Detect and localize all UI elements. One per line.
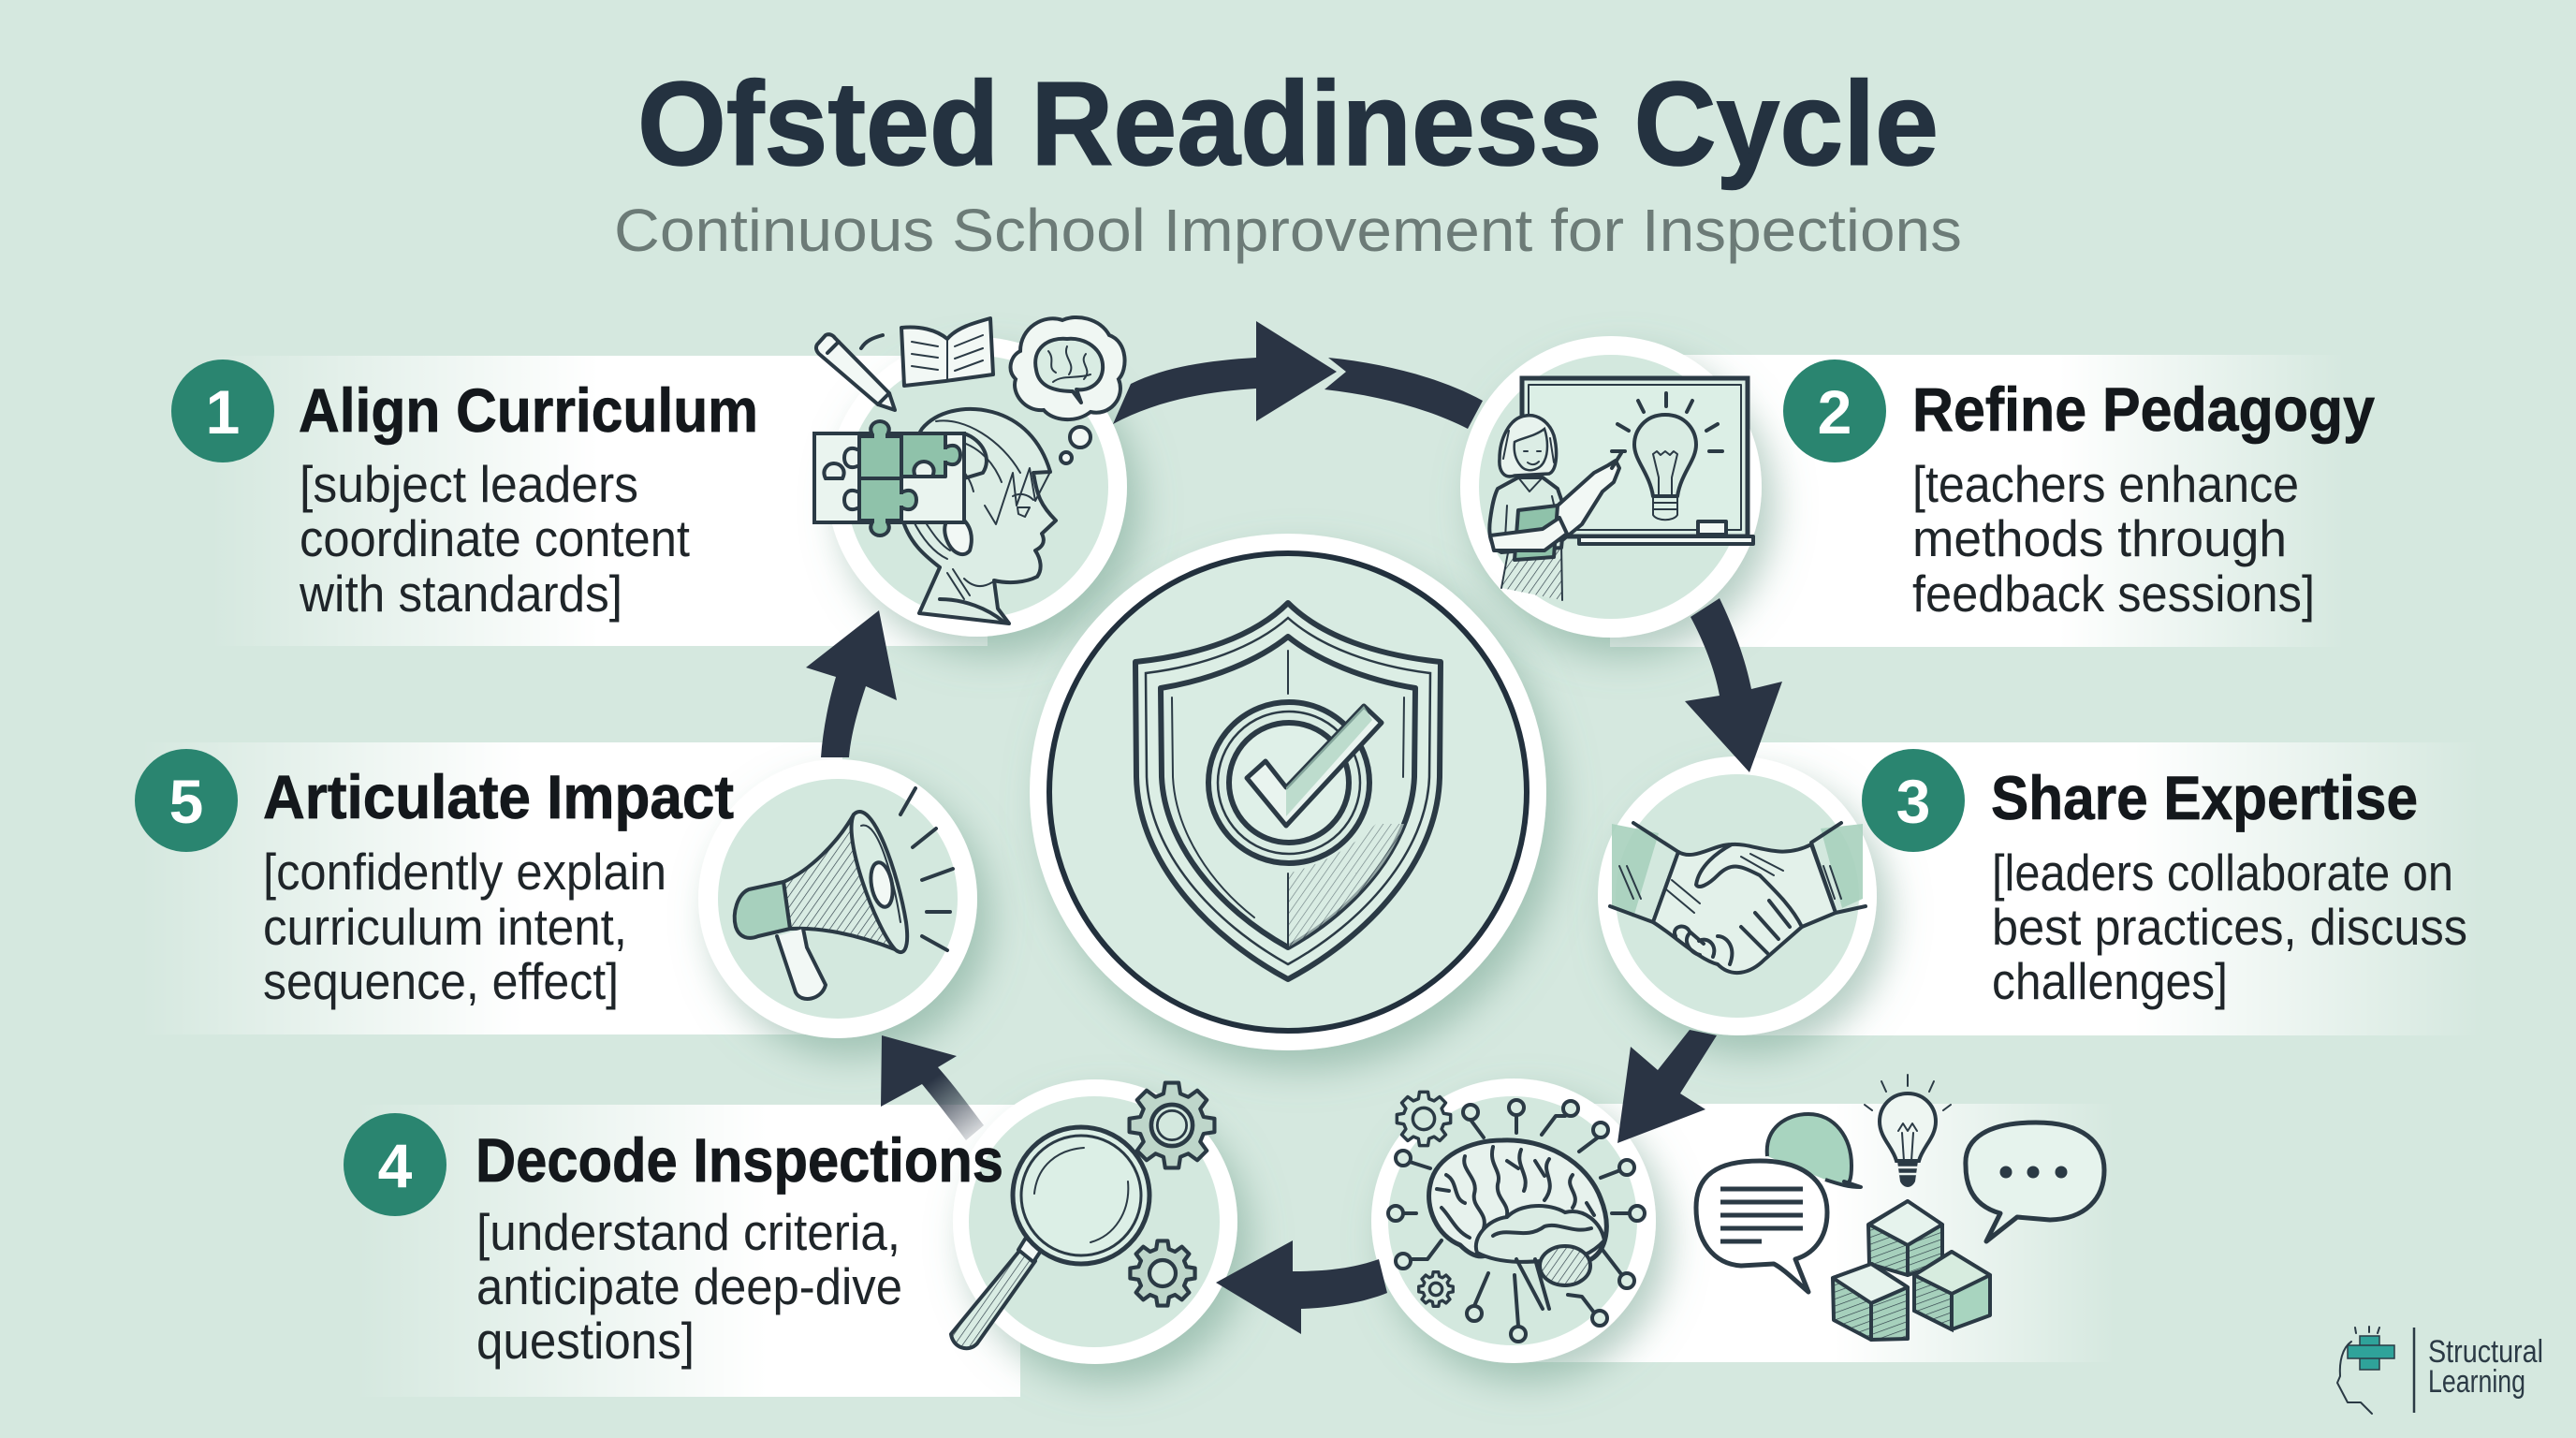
circle: brain bbox=[1371, 1078, 1656, 1363]
logo text: Learning bbox=[2428, 1364, 2525, 1400]
circle: step 2 bbox=[1460, 336, 1762, 638]
body 2: methods through bbox=[1912, 509, 2287, 567]
whiteboard bbox=[1522, 378, 1753, 544]
badge 5 bbox=[135, 749, 238, 852]
arrow: brain to step 4 bbox=[1216, 1240, 1387, 1334]
badge 2 bbox=[1783, 360, 1886, 462]
heading 1: Align Curriculum bbox=[299, 375, 758, 445]
teacher bbox=[1489, 416, 1621, 600]
panel: step 4 background bbox=[356, 1105, 1020, 1397]
subtitle: Continuous School Improvement for Inspections bbox=[614, 197, 1962, 264]
body 4: [understand criteria, bbox=[476, 1203, 900, 1261]
circle: step 1 bbox=[827, 337, 1127, 637]
panel: ideas background bbox=[1516, 1104, 2115, 1362]
badge 3 bbox=[1862, 749, 1965, 852]
body 2: [teachers enhance bbox=[1912, 455, 2299, 513]
badge 1: 1 bbox=[206, 377, 240, 447]
arrow: step 5 to step 1 bbox=[806, 610, 897, 757]
badge 4: 4 bbox=[378, 1131, 413, 1200]
arrow: step 1 to step 2 tail bbox=[1325, 358, 1483, 429]
icon: megaphone bbox=[735, 788, 953, 999]
badge 5: 5 bbox=[169, 767, 203, 836]
gear top bbox=[1397, 1092, 1451, 1146]
panel: step 5 background bbox=[140, 742, 842, 1034]
body 5 bbox=[263, 843, 666, 1010]
puzzle bbox=[814, 421, 987, 536]
circle: step 3 bbox=[1598, 756, 1877, 1035]
arrow: step 4 to step 5 bbox=[881, 1035, 984, 1140]
icon: brain with network nodes bbox=[1388, 1092, 1645, 1342]
heading 3: Share Expertise bbox=[1991, 763, 2418, 832]
boy head bbox=[900, 409, 1056, 624]
ellipsis speech bubble bbox=[1966, 1123, 2104, 1241]
gear large bbox=[1130, 1083, 1214, 1167]
arrow: step 1 to step 2 bbox=[1113, 321, 1337, 424]
lightbulb bbox=[1612, 393, 1722, 520]
arrow: step 3 to brain bbox=[1617, 1030, 1717, 1143]
step 1 text bbox=[171, 360, 758, 623]
badge 2: 2 bbox=[1818, 377, 1852, 447]
cubes bbox=[1833, 1201, 1990, 1340]
heading 2: Refine Pedagogy bbox=[1912, 374, 2375, 444]
panel: step 3 background bbox=[1741, 742, 2481, 1035]
thought cloud with brain bbox=[1011, 317, 1125, 463]
body 5: [confidently explain bbox=[263, 843, 666, 901]
green speech bubble bbox=[1767, 1114, 1861, 1187]
icon: speech bubbles, lightbulb and cubes bbox=[1696, 1075, 2104, 1340]
body 1: with standards] bbox=[299, 565, 622, 623]
body 3: best practices, discuss bbox=[1992, 898, 2467, 956]
step 3 text bbox=[1862, 749, 2467, 1010]
icon: handshake bbox=[1610, 823, 1866, 973]
gear small bbox=[1130, 1240, 1195, 1306]
body 5: sequence, effect] bbox=[263, 952, 619, 1010]
step 5 text bbox=[135, 749, 734, 1010]
text speech bubble bbox=[1696, 1161, 1827, 1292]
network nodes bbox=[1388, 1100, 1645, 1342]
step 4 text bbox=[344, 1113, 1003, 1370]
body 3: [leaders collaborate on bbox=[1992, 844, 2453, 902]
logo divider bbox=[2413, 1328, 2415, 1413]
arrow: step 2 to step 3 bbox=[1685, 598, 1782, 772]
handle bbox=[951, 1250, 1035, 1348]
body 1: coordinate content bbox=[300, 509, 690, 567]
title: Ofsted Readiness Cycle bbox=[637, 57, 1939, 190]
logo text bbox=[2428, 1334, 2543, 1400]
panel: step 1 background bbox=[211, 356, 988, 646]
brain bbox=[1429, 1140, 1606, 1309]
panel: step 2 background bbox=[1610, 355, 2345, 647]
lightbulb bbox=[1865, 1075, 1951, 1187]
body 2 bbox=[1912, 455, 2315, 623]
body 2: feedback sessions] bbox=[1912, 565, 2315, 623]
logo text: Structural bbox=[2428, 1334, 2543, 1370]
body 4 bbox=[476, 1203, 902, 1370]
icon: magnifier with gears bbox=[951, 1083, 1214, 1348]
lens bbox=[1013, 1127, 1149, 1264]
circle: step 5 bbox=[698, 759, 977, 1038]
logo: Structural Learning bbox=[2337, 1327, 2543, 1414]
logo head bbox=[2337, 1342, 2372, 1414]
badge 4 bbox=[344, 1113, 446, 1216]
heading 4: Decode Inspections bbox=[476, 1125, 1003, 1195]
badge 1 bbox=[171, 360, 274, 462]
icon: teacher at whiteboard with lightbulb bbox=[1489, 378, 1753, 600]
icon: shield bbox=[1135, 603, 1441, 979]
body 3: challenges] bbox=[1992, 952, 2228, 1010]
circle: step 4 bbox=[953, 1079, 1237, 1364]
body 4: anticipate deep-dive bbox=[476, 1257, 902, 1315]
body 1: [subject leaders bbox=[300, 455, 638, 513]
heading 5: Articulate Impact bbox=[263, 762, 734, 831]
badge 3: 3 bbox=[1896, 767, 1930, 836]
body 1 bbox=[299, 455, 690, 623]
body 3 bbox=[1992, 844, 2467, 1010]
pencil bbox=[816, 334, 895, 410]
body 4: questions] bbox=[476, 1312, 695, 1370]
gear bottom bbox=[1419, 1272, 1453, 1306]
icon: boy with puzzle, book, pencil and thought bbox=[814, 317, 1125, 624]
center badge bbox=[1030, 534, 1546, 1050]
logo cross bbox=[2348, 1327, 2394, 1370]
step 2 text bbox=[1783, 360, 2375, 623]
book bbox=[901, 318, 993, 386]
body 5: curriculum intent, bbox=[263, 898, 627, 956]
